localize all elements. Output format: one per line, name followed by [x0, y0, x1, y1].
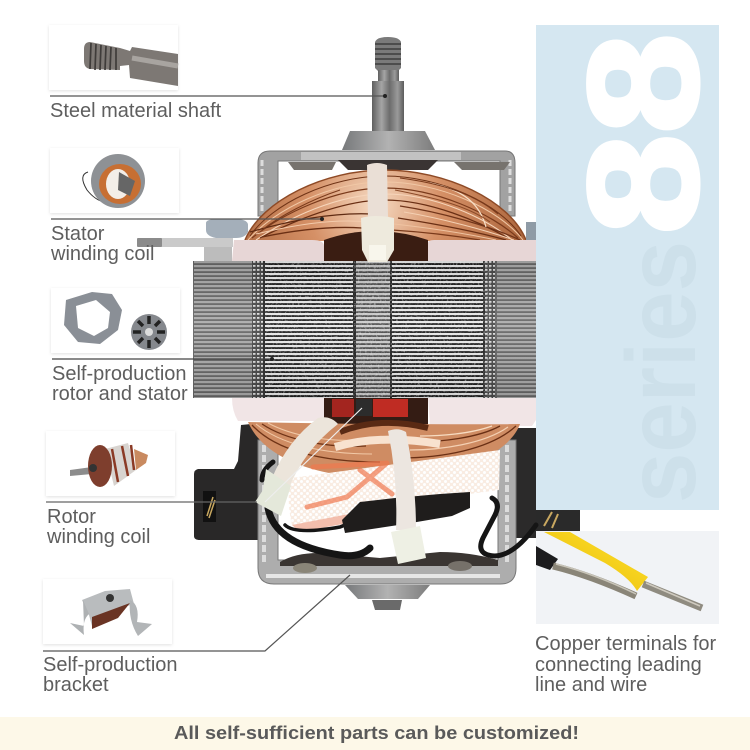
thumbnail: rotor and stator [51, 288, 180, 353]
bottom bearing cone [345, 585, 430, 599]
footer banner [0, 717, 750, 750]
lower copper coil [248, 422, 520, 478]
panel: series 88 [536, 25, 730, 510]
big number 88: 88 [556, 33, 730, 234]
lower bobbin left [232, 398, 324, 421]
terminal strip right [536, 510, 580, 531]
upper bobbin left [232, 240, 324, 261]
footer text: All self-sufficient parts can be customized! [174, 722, 579, 743]
left mounting plate and screw [137, 219, 248, 261]
series label: series [606, 241, 716, 503]
label: rotor and stator: Self-production [52, 363, 187, 385]
label: copper terminals: line and wire [535, 674, 647, 696]
leader line: rotor and stator [52, 357, 274, 361]
cable tie left [255, 417, 338, 516]
upper copper coil [245, 170, 526, 241]
label: stator coil: Stator [51, 223, 105, 245]
thumbnail: steel shaft [49, 25, 178, 90]
leader line: bracket [43, 575, 350, 651]
coil centre gap [324, 231, 428, 261]
bottom nut [372, 600, 402, 610]
label: bracket: Self-production [43, 654, 178, 676]
black terminal block right [510, 428, 536, 538]
woven insulation sleeve [289, 450, 500, 532]
label: copper terminals: Copper terminals for [535, 633, 717, 655]
label: rotor and stator: rotor and stator [52, 383, 188, 405]
leader line: stator coil [51, 217, 324, 221]
lower centre opening [324, 398, 428, 430]
lower bracket [258, 440, 516, 584]
terminal spring left [203, 491, 216, 522]
cable tie top [361, 163, 394, 262]
right mounting screw [526, 222, 536, 240]
black lead wires [262, 462, 536, 556]
motor shaft [372, 37, 404, 132]
stator lamination stack [193, 261, 536, 398]
cable tie right [388, 429, 426, 564]
thumbnail: bracket [43, 579, 172, 644]
thumbnail: copper terminal wires [536, 531, 719, 624]
upper bracket [258, 151, 515, 216]
label: copper terminals: connecting leading [535, 654, 702, 676]
label: stator coil: winding coil [50, 243, 154, 265]
label: rotor: Rotor [47, 506, 96, 528]
label: steel shaft: Steel material shaft [50, 100, 222, 122]
leader line: shaft [50, 94, 387, 98]
upper bobbin right [428, 240, 536, 261]
motor illustration [137, 37, 580, 610]
thumbnail: stator coil [50, 148, 179, 213]
label: rotor: winding coil [46, 526, 150, 548]
heat-shrink joints [342, 492, 470, 533]
leader line: rotor coil [46, 408, 362, 502]
lower bobbin right [428, 398, 536, 426]
thumbnail: rotor [46, 431, 175, 496]
top bearing cone [342, 131, 435, 150]
black terminal block left [194, 423, 262, 540]
label: bracket: bracket [43, 674, 109, 696]
